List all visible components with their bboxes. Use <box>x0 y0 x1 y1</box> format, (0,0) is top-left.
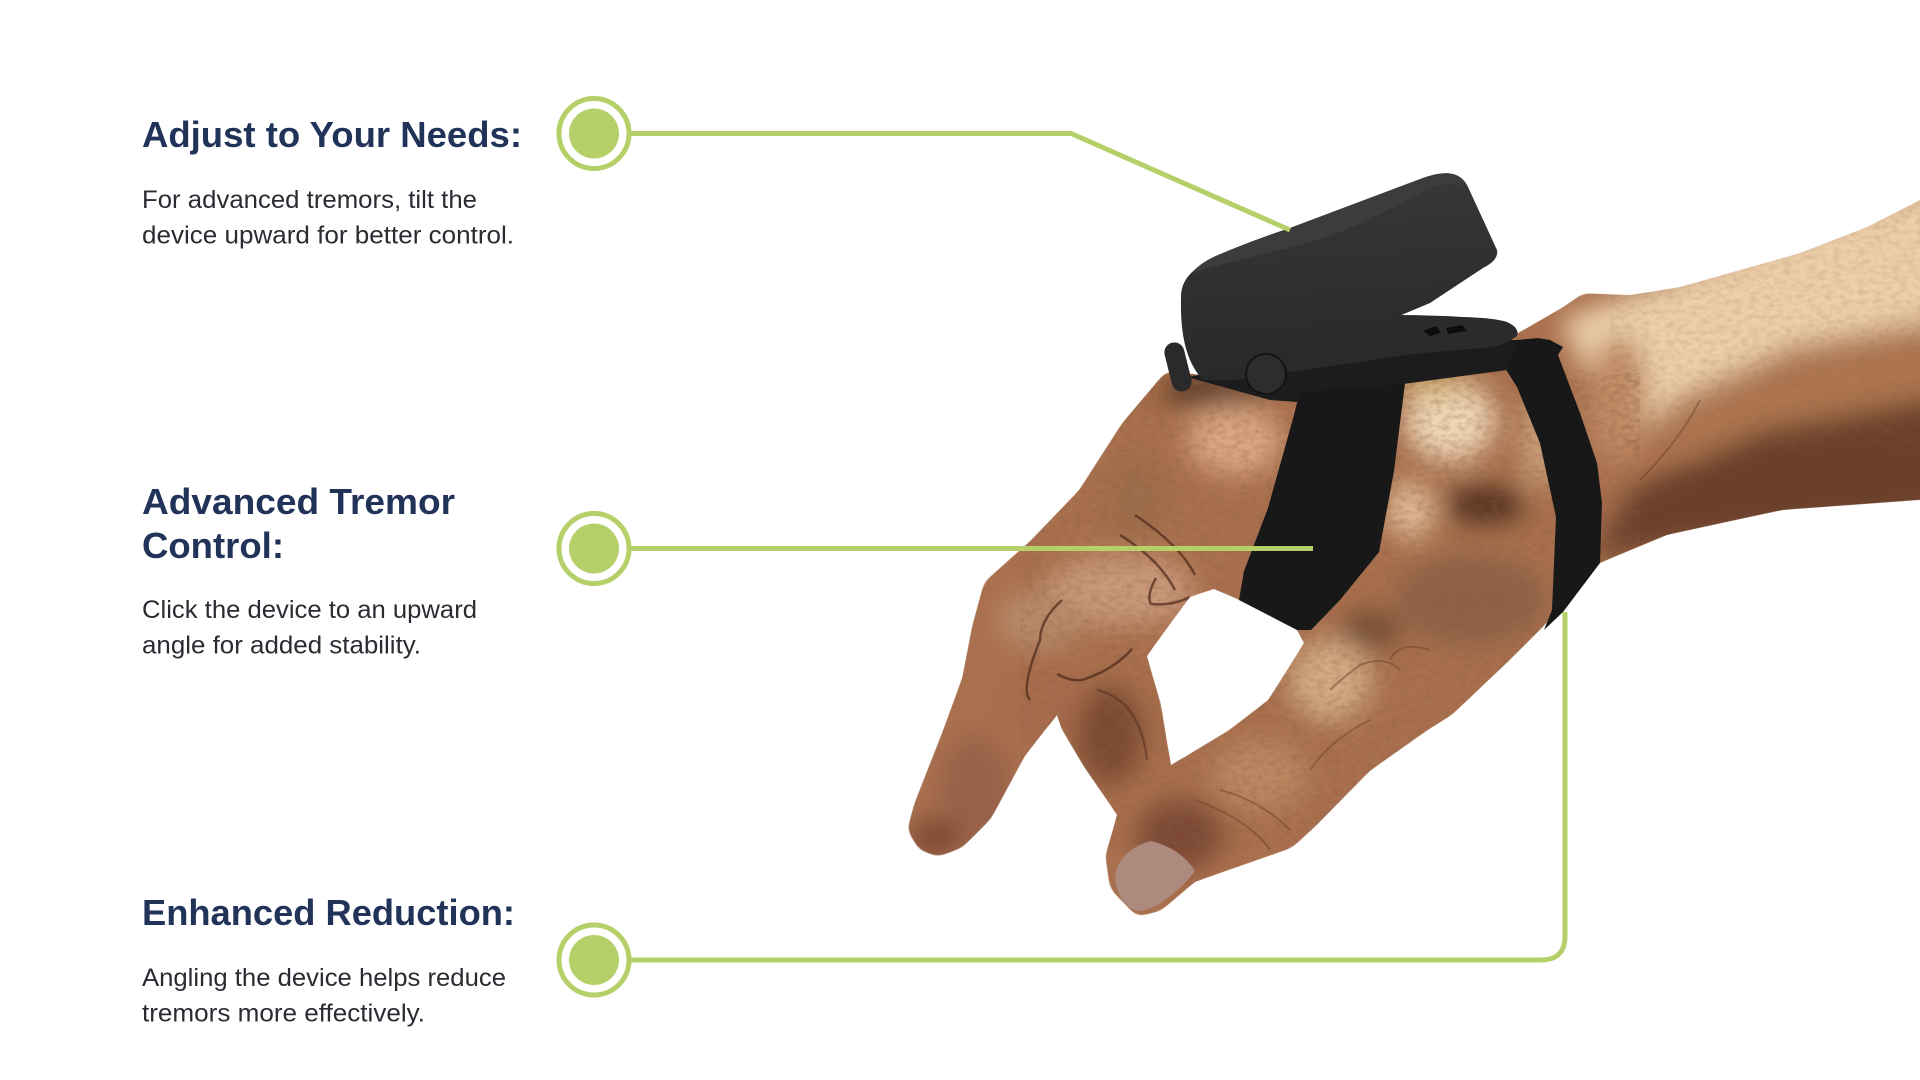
pivot button <box>1246 354 1286 394</box>
text block: upward angle <box>142 596 477 660</box>
icon: thumbnail <box>1115 841 1195 911</box>
text block: tilt the device: device upward for better control. <box>142 222 514 250</box>
connector: top callout <box>559 98 1290 230</box>
device: middle strap <box>1239 375 1406 630</box>
logo mark <box>1423 325 1467 336</box>
heading: Enhanced Reduction: Enhanced Reduction: <box>142 892 515 933</box>
text block: tilt the device <box>142 186 514 250</box>
device lid <box>1181 173 1497 380</box>
heading: Adjust to Your Needs: Adjust to Your Needs: <box>142 114 522 155</box>
device base plate <box>1270 315 1518 372</box>
device: wrist strap <box>1500 338 1602 630</box>
device: tilted tremor unit <box>1162 173 1518 402</box>
text block: reduce tremors <box>142 964 506 1028</box>
connector: middle callout <box>559 514 1313 584</box>
infographic canvas <box>142 96 1920 1026</box>
text block: upward angle: angle for added stability. <box>142 632 421 660</box>
text block: reduce tremors: tremors more effectively. <box>142 1000 425 1028</box>
text block: tilt the device: For advanced tremors, tilt the <box>142 186 477 214</box>
heading: Advanced Tremor Control: Advanced Tremor <box>142 481 455 522</box>
heading: Advanced Tremor Control: Control: <box>142 525 284 566</box>
illustration: hand and forearm <box>908 200 1920 916</box>
text block: upward angle: Click the device to an upward <box>142 596 477 624</box>
device base frame <box>1187 340 1517 402</box>
side pin <box>1162 340 1194 394</box>
lid top face <box>1191 173 1468 274</box>
text block: reduce tremors: Angling the device helps reduce <box>142 964 506 992</box>
heading: Advanced Tremor Control <box>142 481 455 566</box>
connector: bottom callout <box>559 612 1565 995</box>
